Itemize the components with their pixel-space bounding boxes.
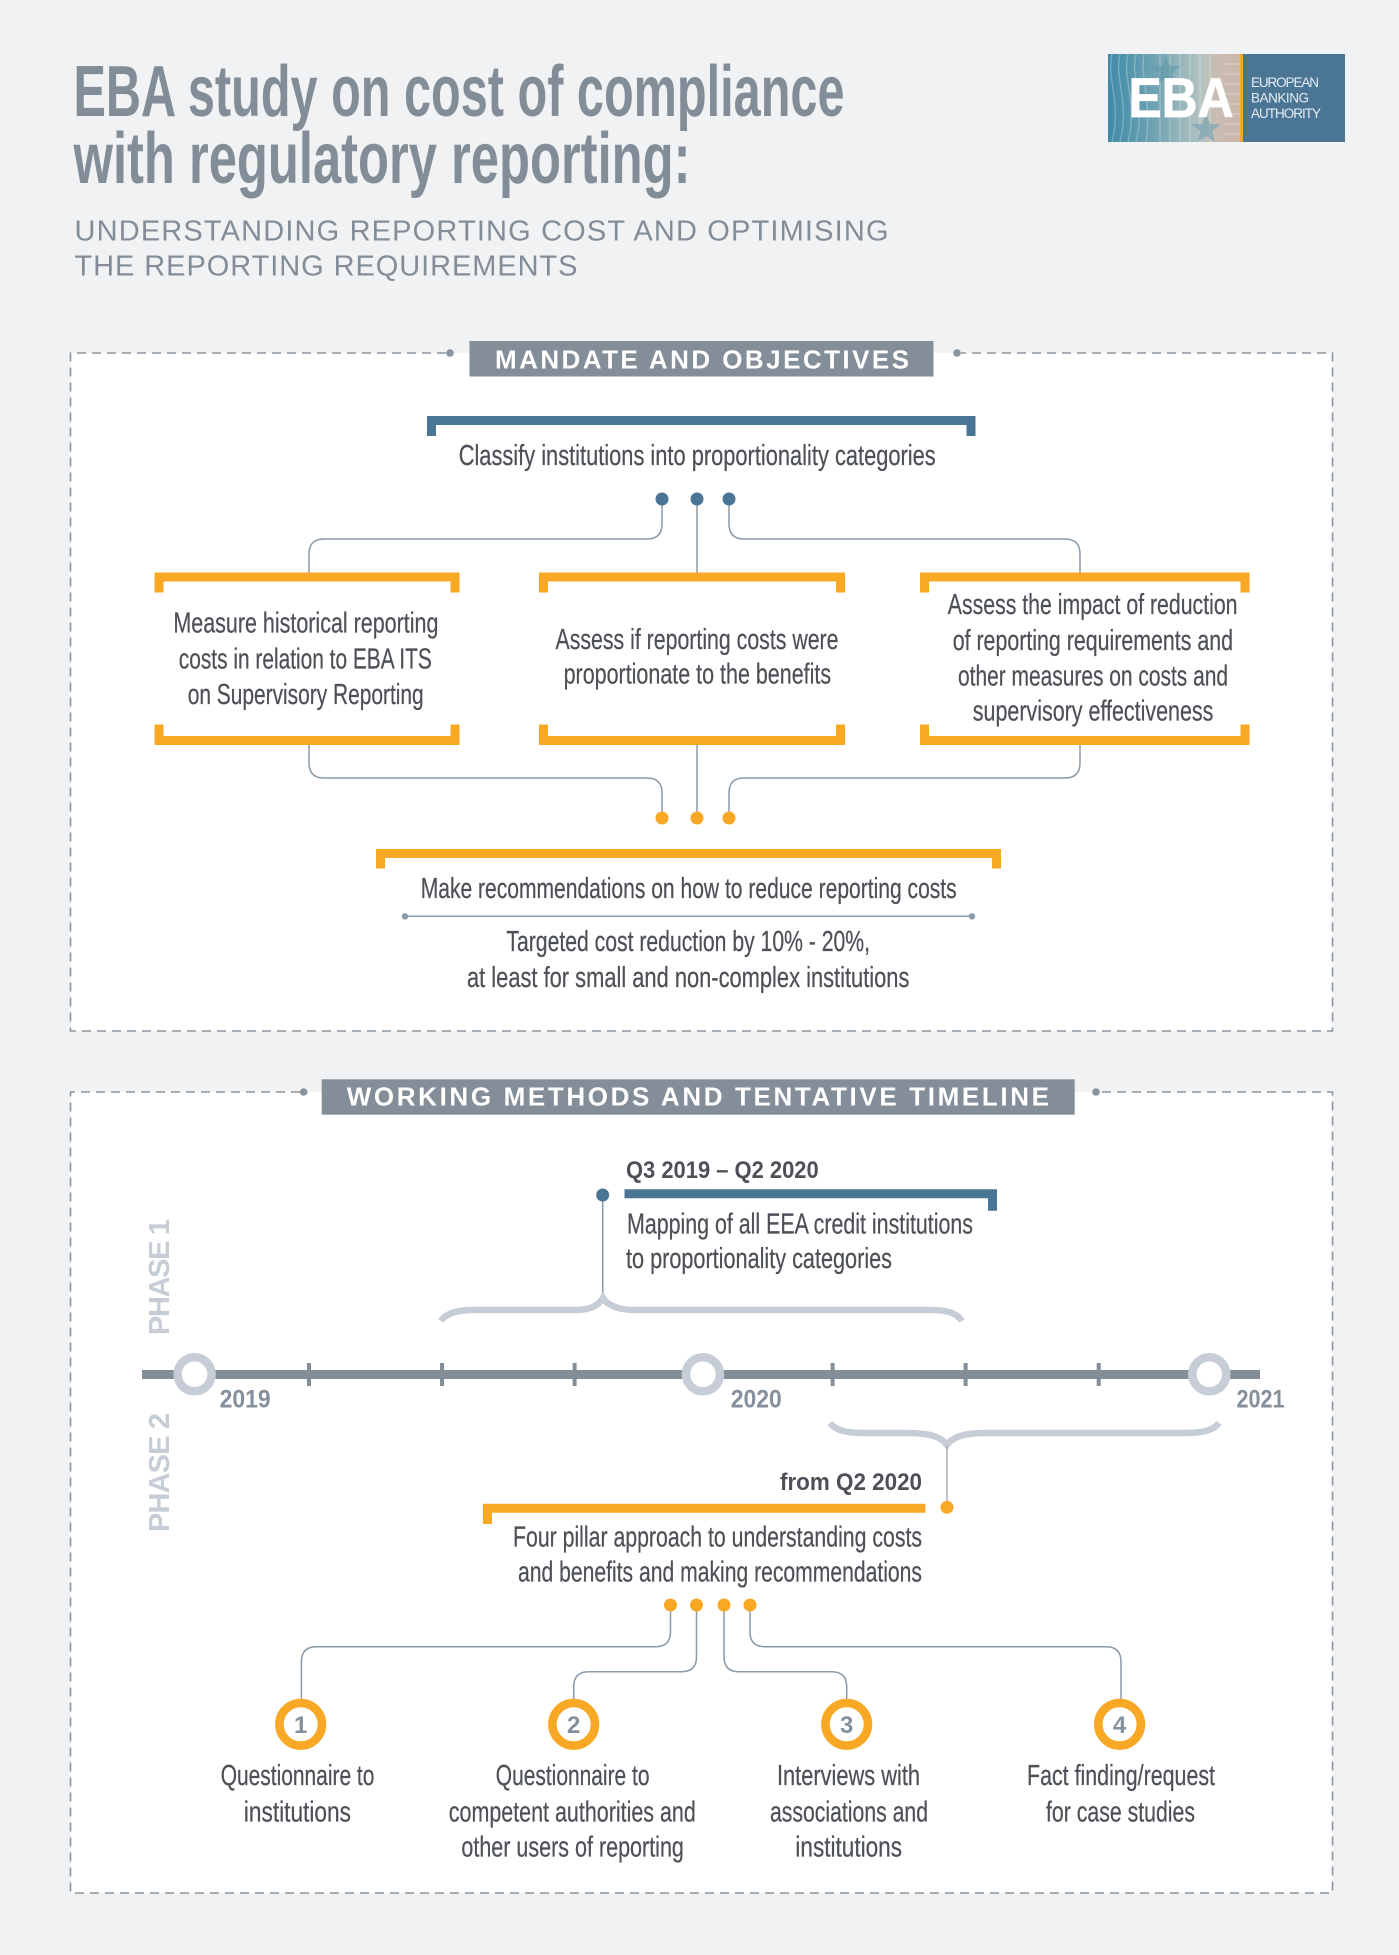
logo: European Banking Authority: AUTHORITY — [1251, 106, 1321, 121]
pillar 3: 3 — [840, 1712, 853, 1739]
panel: mandate and objectives — [70, 341, 1332, 1031]
objective: measure historical costs: Measure historical reporting — [173, 608, 438, 640]
subtitle — [74, 216, 888, 282]
title: EBA study on cost of compliance — [74, 52, 844, 132]
brace: phase 2 span — [830, 1423, 1219, 1445]
pillar 2 — [449, 1703, 696, 1864]
phase 2 callout: and benefits and making recommendations — [518, 1557, 922, 1589]
label: phase 1: PHASE 1 — [144, 1219, 176, 1335]
phase 2 callout — [488, 1445, 954, 1589]
connectors to four pillars — [301, 1598, 1121, 1699]
objective: impact of reduction: of reporting requirements and — [953, 625, 1233, 657]
objective: impact of reduction — [924, 577, 1245, 740]
pillar 4: 4 — [1113, 1712, 1127, 1739]
pillar 1: Questionnaire to — [221, 1760, 374, 1792]
phase 1 callout: to proportionality categories — [626, 1243, 892, 1275]
phase 1 callout: Q3 2019 – Q2 2020 — [626, 1157, 819, 1184]
pillar 4 — [1027, 1703, 1215, 1829]
phase 2 callout: Four pillar approach to understanding costs — [513, 1522, 922, 1554]
pillar 1: institutions — [244, 1797, 351, 1829]
pillar 1: 1 — [294, 1712, 307, 1739]
pillar 1 — [221, 1703, 374, 1829]
subtitle: UNDERSTANDING REPORTING COST AND OPTIMISING — [74, 216, 888, 248]
title: with regulatory reporting: — [73, 119, 691, 199]
objective: proportionate costs — [544, 577, 840, 740]
objective: recommendations and target — [380, 854, 996, 994]
pillar 4: for case studies — [1046, 1797, 1195, 1829]
connectors from objectives to recommendations — [309, 745, 1080, 824]
heading: working methods: WORKING METHODS AND TENTATIVE TIMELINE — [347, 1082, 1049, 1112]
objective: measure historical costs: on Supervisory Reporting — [188, 679, 424, 711]
heading: mandate and objectives: MANDATE AND OBJECTIVES — [495, 344, 909, 374]
pillar 2: other users of reporting — [461, 1832, 684, 1864]
phase 1 callout: Mapping of all EEA credit institutions — [627, 1208, 973, 1240]
subtitle: THE REPORTING REQUIREMENTS — [74, 250, 578, 282]
pillar 3: associations and — [770, 1797, 928, 1829]
objective: recommendations and target: Make recommendations on how to reduce reporting costs — [421, 873, 957, 905]
label: phase 2: PHASE 2 — [144, 1413, 176, 1532]
timeline — [142, 1357, 1285, 1414]
pillar 2: 2 — [567, 1712, 580, 1739]
timeline: 2019 — [220, 1386, 271, 1414]
pillar 2: Questionnaire to — [496, 1760, 650, 1792]
pillar 3: institutions — [795, 1832, 902, 1864]
panel: working methods and timeline — [70, 1079, 1332, 1893]
objective: recommendations and target: at least for small and non-complex institutions — [467, 962, 909, 994]
objective: impact of reduction: supervisory effectiveness — [973, 696, 1213, 728]
objective: measure historical costs: costs in relation to EBA ITS — [179, 644, 432, 676]
logo: European Banking Authority: EBA — [1128, 66, 1234, 129]
objective: proportionate costs: Assess if reporting costs were — [556, 624, 838, 656]
objective: classify institutions — [432, 420, 971, 472]
phase 1 callout — [596, 1157, 992, 1298]
pillar 3: Interviews with — [777, 1760, 920, 1792]
logo: European Banking Authority: BANKING — [1251, 90, 1309, 106]
phase 2 callout: from Q2 2020 — [780, 1469, 922, 1496]
connectors from classify to three objectives — [309, 492, 1080, 573]
logo: European Banking Authority — [1108, 54, 1345, 142]
timeline: 2021 — [1236, 1386, 1285, 1414]
title — [73, 52, 845, 199]
objective: recommendations and target: Targeted cost reduction by 10% - 20%, — [506, 926, 870, 958]
objective: classify institutions: Classify institutions into proportionality categories — [459, 440, 936, 472]
pillar 3 — [770, 1703, 928, 1864]
objective: measure historical costs — [159, 577, 455, 740]
pillar 4: Fact finding/request — [1027, 1760, 1215, 1792]
objective: impact of reduction: other measures on costs and — [958, 660, 1228, 692]
timeline: 2020 — [731, 1386, 782, 1414]
brace: phase 1 span — [441, 1298, 962, 1321]
pillar 2: competent authorities and — [449, 1797, 696, 1829]
objective: proportionate costs: proportionate to the benefits — [564, 658, 831, 690]
objective: impact of reduction: Assess the impact of reduction — [948, 589, 1238, 621]
logo: European Banking Authority: EUROPEAN — [1251, 75, 1319, 90]
